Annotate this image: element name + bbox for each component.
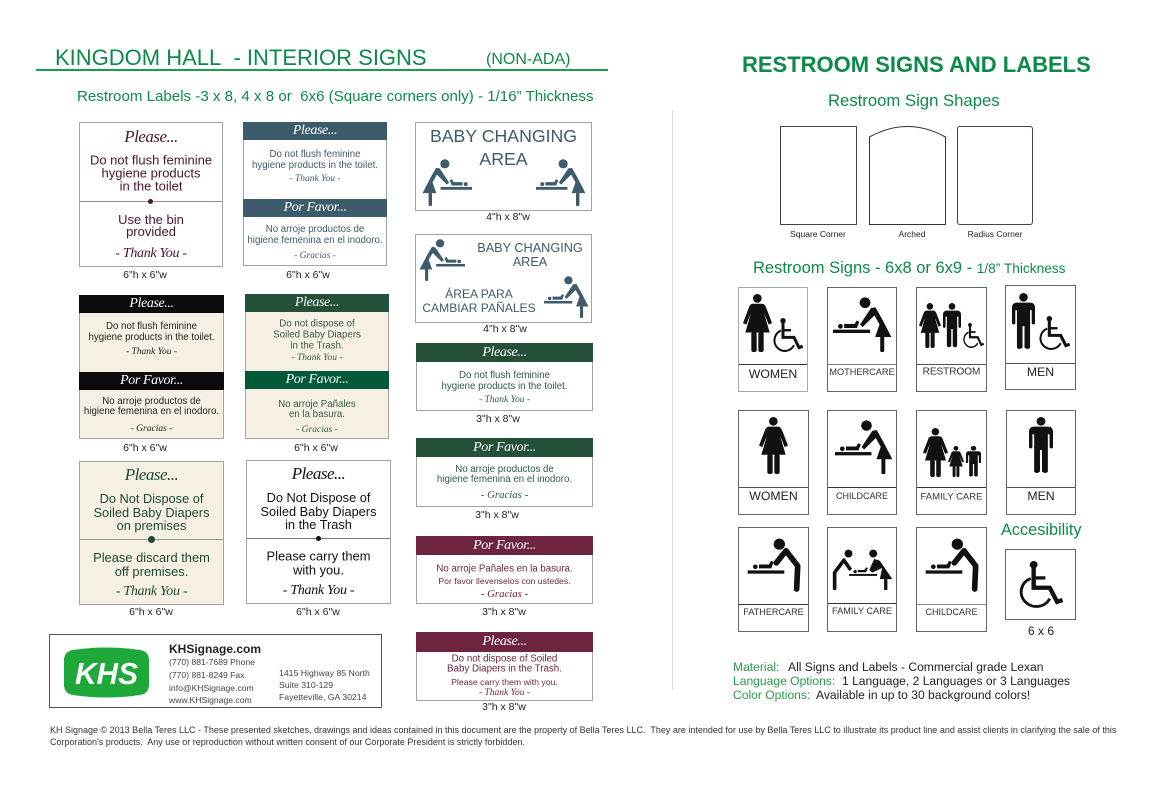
phone and web details: (770) 881-7689 Phone: [169, 657, 255, 667]
label: WOMEN: [749, 367, 797, 381]
text block: Please discard them: [93, 550, 210, 565]
gracias: - Gracias -: [296, 425, 338, 435]
header: please: Please...: [129, 296, 174, 311]
text block: Soiled Baby Diapers: [261, 503, 376, 518]
text block: [247, 224, 383, 246]
text block: in the Trash.: [290, 340, 344, 352]
thank you: - Thank You -: [479, 395, 530, 405]
text block: ÁREA PARA: [445, 287, 513, 301]
specifications text: [733, 660, 1070, 702]
label: FATHERCARE: [743, 607, 804, 617]
text block: higiene femenina en el inodoro.: [437, 474, 572, 485]
sign: family care, two adults: [827, 527, 897, 632]
size label: 3"h x 8"w: [482, 701, 526, 713]
text block: [430, 126, 577, 169]
text block: Do Not Dispose of: [100, 491, 203, 506]
text block: [84, 396, 219, 417]
phone and web details: [169, 657, 255, 705]
panel: 3x8 green please: [416, 343, 593, 411]
text block: No arroje productos de: [266, 224, 364, 235]
logo: KHS: [64, 648, 149, 698]
label: MEN: [1027, 365, 1054, 379]
icon: father changing baby: [747, 538, 801, 592]
specifications text: Language Options:: [733, 674, 835, 688]
text block: Do not flush feminine: [106, 321, 197, 332]
size label: 6"h x 6"w: [286, 269, 330, 281]
text block: in the toilet: [120, 178, 182, 194]
text block: [267, 548, 370, 577]
panel: bilingual baby changing sign: [415, 234, 592, 323]
text block: BABY CHANGING: [430, 126, 577, 146]
panel: 3x8 maroon por favor: [416, 536, 593, 604]
icon: mother changing baby, top left: [420, 239, 465, 281]
label: CHILDCARE: [836, 491, 888, 501]
specifications text: All Signs and Labels - Commercial grade Lexan: [788, 660, 1043, 674]
header: please: Please...: [293, 123, 337, 138]
sign: men accessible: [1005, 285, 1076, 390]
thank you: - Thank You -: [126, 347, 177, 357]
header: Por Favor...: [473, 538, 536, 553]
heading: Please...: [125, 465, 178, 484]
sign: childcare: [827, 410, 897, 515]
text block: higiene femenina en el inodoro.: [247, 235, 383, 246]
text block: [447, 653, 562, 674]
size label: 6"h x 6"w: [296, 606, 340, 618]
header: Por Favor...: [473, 440, 536, 455]
panel: sign green on cream: [245, 294, 389, 439]
text block: Please carry them: [267, 548, 370, 564]
heading: Please...: [292, 464, 345, 483]
thank you: - Thank You -: [116, 584, 187, 599]
address: [279, 668, 370, 702]
specifications text: 1 Language, 2 Languages or 3 Languages: [842, 674, 1070, 688]
icon: girl: [948, 446, 964, 477]
icon: man: [1012, 293, 1035, 350]
text block: Baby Diapers in the Trash.: [447, 664, 562, 674]
label: FAMILY CARE: [832, 606, 892, 616]
header: [416, 343, 593, 362]
text block: [252, 149, 378, 171]
header: por favor: Por Favor...: [284, 200, 346, 215]
icon: boy: [966, 446, 981, 477]
gracias: - Gracias -: [131, 424, 172, 434]
header: [416, 536, 593, 555]
panel: sign diapers cream: [79, 461, 224, 605]
icon: father changing baby: [925, 538, 979, 592]
sign: fathercare: [738, 527, 809, 632]
text block: en la basura.: [289, 409, 345, 420]
company name: KHSignage.com: [169, 642, 261, 656]
thank you: - Thank You -: [115, 246, 187, 261]
header: please: [245, 294, 389, 312]
panel: sign diapers white: [246, 460, 391, 604]
sign: childcare, father: [916, 527, 987, 632]
panel: sign white please maroon: [79, 122, 223, 267]
icon: wheelchair: [1039, 316, 1070, 350]
size label: 6"h x 6"w: [123, 269, 167, 281]
text block: Do Not Dispose of: [267, 490, 370, 505]
text block: [118, 212, 184, 239]
shape: arched: [869, 126, 946, 225]
text block: CAMBIAR PAÑALES: [422, 301, 536, 315]
sign: women: [738, 410, 809, 515]
size label: 3"h x 8"w: [475, 509, 519, 521]
icon: man: [943, 303, 961, 348]
text block: hygiene products: [101, 166, 200, 180]
shape label: Radius Corner: [968, 229, 1022, 239]
text block: in the Trash: [285, 517, 352, 532]
icon: wheelchair: [1019, 561, 1063, 608]
specifications text: Color Options:: [733, 688, 810, 702]
sign: women accessible: [738, 287, 808, 392]
size label: 3"h x 8"w: [482, 606, 526, 618]
text block: on premises: [117, 518, 186, 533]
phone and web details: info@KHSignage.com: [169, 683, 254, 693]
title: restroom signs and labels: RESTROOM SIGNS AND LABELS: [742, 52, 1091, 77]
text block: Do not dispose of: [279, 318, 355, 330]
panel: 3x8 green por favor: [416, 438, 593, 507]
header: please: [79, 295, 224, 313]
icon: two parents changing baby: [832, 549, 893, 590]
text block: No arroje productos de: [455, 464, 554, 475]
address: Fayetteville, GA 30214: [279, 692, 366, 702]
title: Kingdom Hall interior signs: (NON-ADA): [486, 51, 570, 68]
text block: [273, 318, 361, 352]
header: por favor: [79, 372, 224, 390]
panel: 3x8 maroon please: [416, 632, 593, 701]
text block: [90, 152, 212, 194]
label: CHILDCARE: [925, 607, 978, 617]
sign: wheelchair 6x6: [1005, 549, 1076, 620]
panel: sign black on cream: [79, 295, 224, 439]
text block: with you.: [293, 562, 344, 577]
shape: square corner: [780, 126, 857, 225]
header: por favor: Por Favor...: [286, 372, 348, 387]
icon: woman: [923, 428, 948, 477]
thank you: - Thank You -: [289, 174, 341, 184]
icon: mother changing baby, bottom right: [544, 276, 588, 318]
icon: mother changing baby: [833, 297, 892, 352]
gracias: - Gracias -: [481, 588, 528, 600]
header: por favor: [245, 371, 389, 389]
subtitle: restroom labels: Restroom Labels -3 x 8, 4 x 8 or 6x6 (Square corners only) - 1/16” Thickness: [77, 88, 594, 105]
size label: 6"h x 6"w: [123, 442, 167, 454]
title: Kingdom Hall interior signs: KINGDOM HALL - INTERIOR SIGNS: [55, 45, 427, 70]
text block: AREA: [513, 255, 547, 269]
icon: mother changing baby, right: [536, 159, 586, 206]
text block: [94, 491, 210, 533]
text block: Do not flush feminine: [459, 370, 550, 380]
header: por favor: [243, 199, 387, 217]
text block: [437, 464, 572, 485]
shape label: Arched: [899, 229, 925, 239]
header: Please...: [482, 345, 527, 360]
thank you: - Thank You -: [283, 583, 354, 598]
size label: 4"h x 8"w: [483, 323, 527, 335]
legal notice: [50, 725, 1116, 747]
specifications text: Material:: [733, 660, 779, 674]
panel: baby changing area sign: [415, 122, 592, 211]
phone and web details: www.KHSignage.com: [169, 695, 252, 705]
label: FAMILY CARE: [921, 492, 982, 502]
panel: sign teal bilingual: [243, 122, 387, 266]
icon: mother changing baby, left: [422, 159, 472, 206]
thank you: - Thank You -: [291, 353, 343, 363]
text block: Soiled Baby Diapers: [273, 330, 361, 340]
icon: woman: [743, 294, 772, 352]
heading: accessibility: Accesibility: [1001, 521, 1082, 539]
size label: 6"h x 6"w: [294, 442, 338, 454]
text block: Soiled Baby Diapers: [94, 504, 209, 519]
text block: hygiene products in the toilet.: [88, 332, 215, 343]
text block: Do not dispose of Soiled: [452, 653, 557, 664]
sign: men: [1006, 410, 1076, 515]
text block: [477, 241, 583, 269]
text block: No arroje Pañales: [278, 399, 356, 410]
text block: provided: [126, 224, 176, 239]
text block: Please carry them with you.: [451, 677, 558, 687]
heading: Please...: [124, 127, 178, 146]
shape label: Square Corner: [790, 229, 846, 239]
text block: [88, 321, 215, 343]
label: WOMEN: [749, 489, 798, 503]
text block: [422, 287, 536, 315]
address: 1415 Highway 85 North: [279, 668, 370, 678]
heading: sign shapes: Restroom Sign Shapes: [828, 91, 1000, 110]
label: MEN: [1027, 489, 1055, 503]
text block: hygiene products in the toilet.: [252, 160, 378, 171]
text block: Do not flush feminine: [269, 149, 360, 160]
text block: higiene femenina en el inodoro.: [84, 406, 219, 417]
header: [416, 438, 593, 457]
address: Suite 310-129: [279, 680, 333, 690]
header: please: Please...: [295, 295, 339, 310]
gracias: - Gracias -: [481, 489, 528, 501]
label: RESTROOM: [923, 366, 980, 378]
size label: 6"h x 6"w: [129, 606, 173, 618]
text block: Do not flush feminine: [90, 152, 212, 168]
text block: off premises.: [115, 564, 188, 579]
phone and web details: (770) 881-8249 Fax: [169, 670, 244, 680]
shape: radius corner: [957, 126, 1033, 225]
text block: Por favor llevenselos con ustedes.: [438, 576, 571, 586]
heading: restroom signs: Restroom Signs - 6x8 or 6x9 - 1/8” Thickness: [753, 259, 1066, 277]
label: MOTHERCARE: [829, 367, 895, 377]
thank you: - Thank You -: [479, 688, 530, 698]
size label: 3"h x 8"w: [476, 413, 520, 425]
icon: woman: [759, 417, 788, 474]
header: por favor: Por Favor...: [120, 373, 183, 388]
sign: family care: [916, 410, 987, 515]
text block: [93, 550, 210, 579]
size label: 6 x 6: [1028, 624, 1054, 638]
gracias: - Gracias -: [294, 251, 336, 261]
text block: AREA: [479, 149, 528, 169]
icon: woman: [919, 303, 941, 348]
text block: No arroje productos de: [102, 396, 201, 407]
icon: wheelchair: [963, 323, 984, 348]
header: Please...: [482, 634, 527, 649]
text block: Use the bin: [118, 212, 184, 227]
header: please: [243, 122, 387, 140]
size label: 4"h x 8"w: [486, 211, 530, 223]
panel: company contact box: [49, 634, 382, 708]
text block: BABY CHANGING: [477, 241, 583, 255]
icon: man: [1029, 417, 1053, 474]
icon: wheelchair: [773, 318, 803, 352]
text block: hygiene products in the toilet.: [441, 380, 568, 392]
specifications text: Available in up to 30 background colors!: [816, 688, 1030, 702]
text block: [278, 399, 356, 420]
text block: No arroje Pañales en la basura.: [436, 564, 573, 574]
text block: [261, 490, 376, 532]
header: [416, 632, 593, 652]
legal notice: KH Signage © 2013 Bella Teres LLC - These presented sketches, drawings and ideas contained in this document are the property of Bella Teres LLC. They are intended for use by Bella Teres LLC to illustrate its product line and assist clients in clarifying the sale of this: [50, 725, 1116, 735]
text block: [441, 370, 568, 392]
logo: KHS: KHS: [75, 656, 138, 691]
legal notice: Corporation's products. Any use or reproduction without written consent of our Corporate President is strictly forbidden.: [50, 736, 525, 746]
sign: mothercare: [827, 287, 897, 392]
sign: restroom: [916, 287, 987, 392]
icon: mother changing baby: [835, 420, 892, 474]
